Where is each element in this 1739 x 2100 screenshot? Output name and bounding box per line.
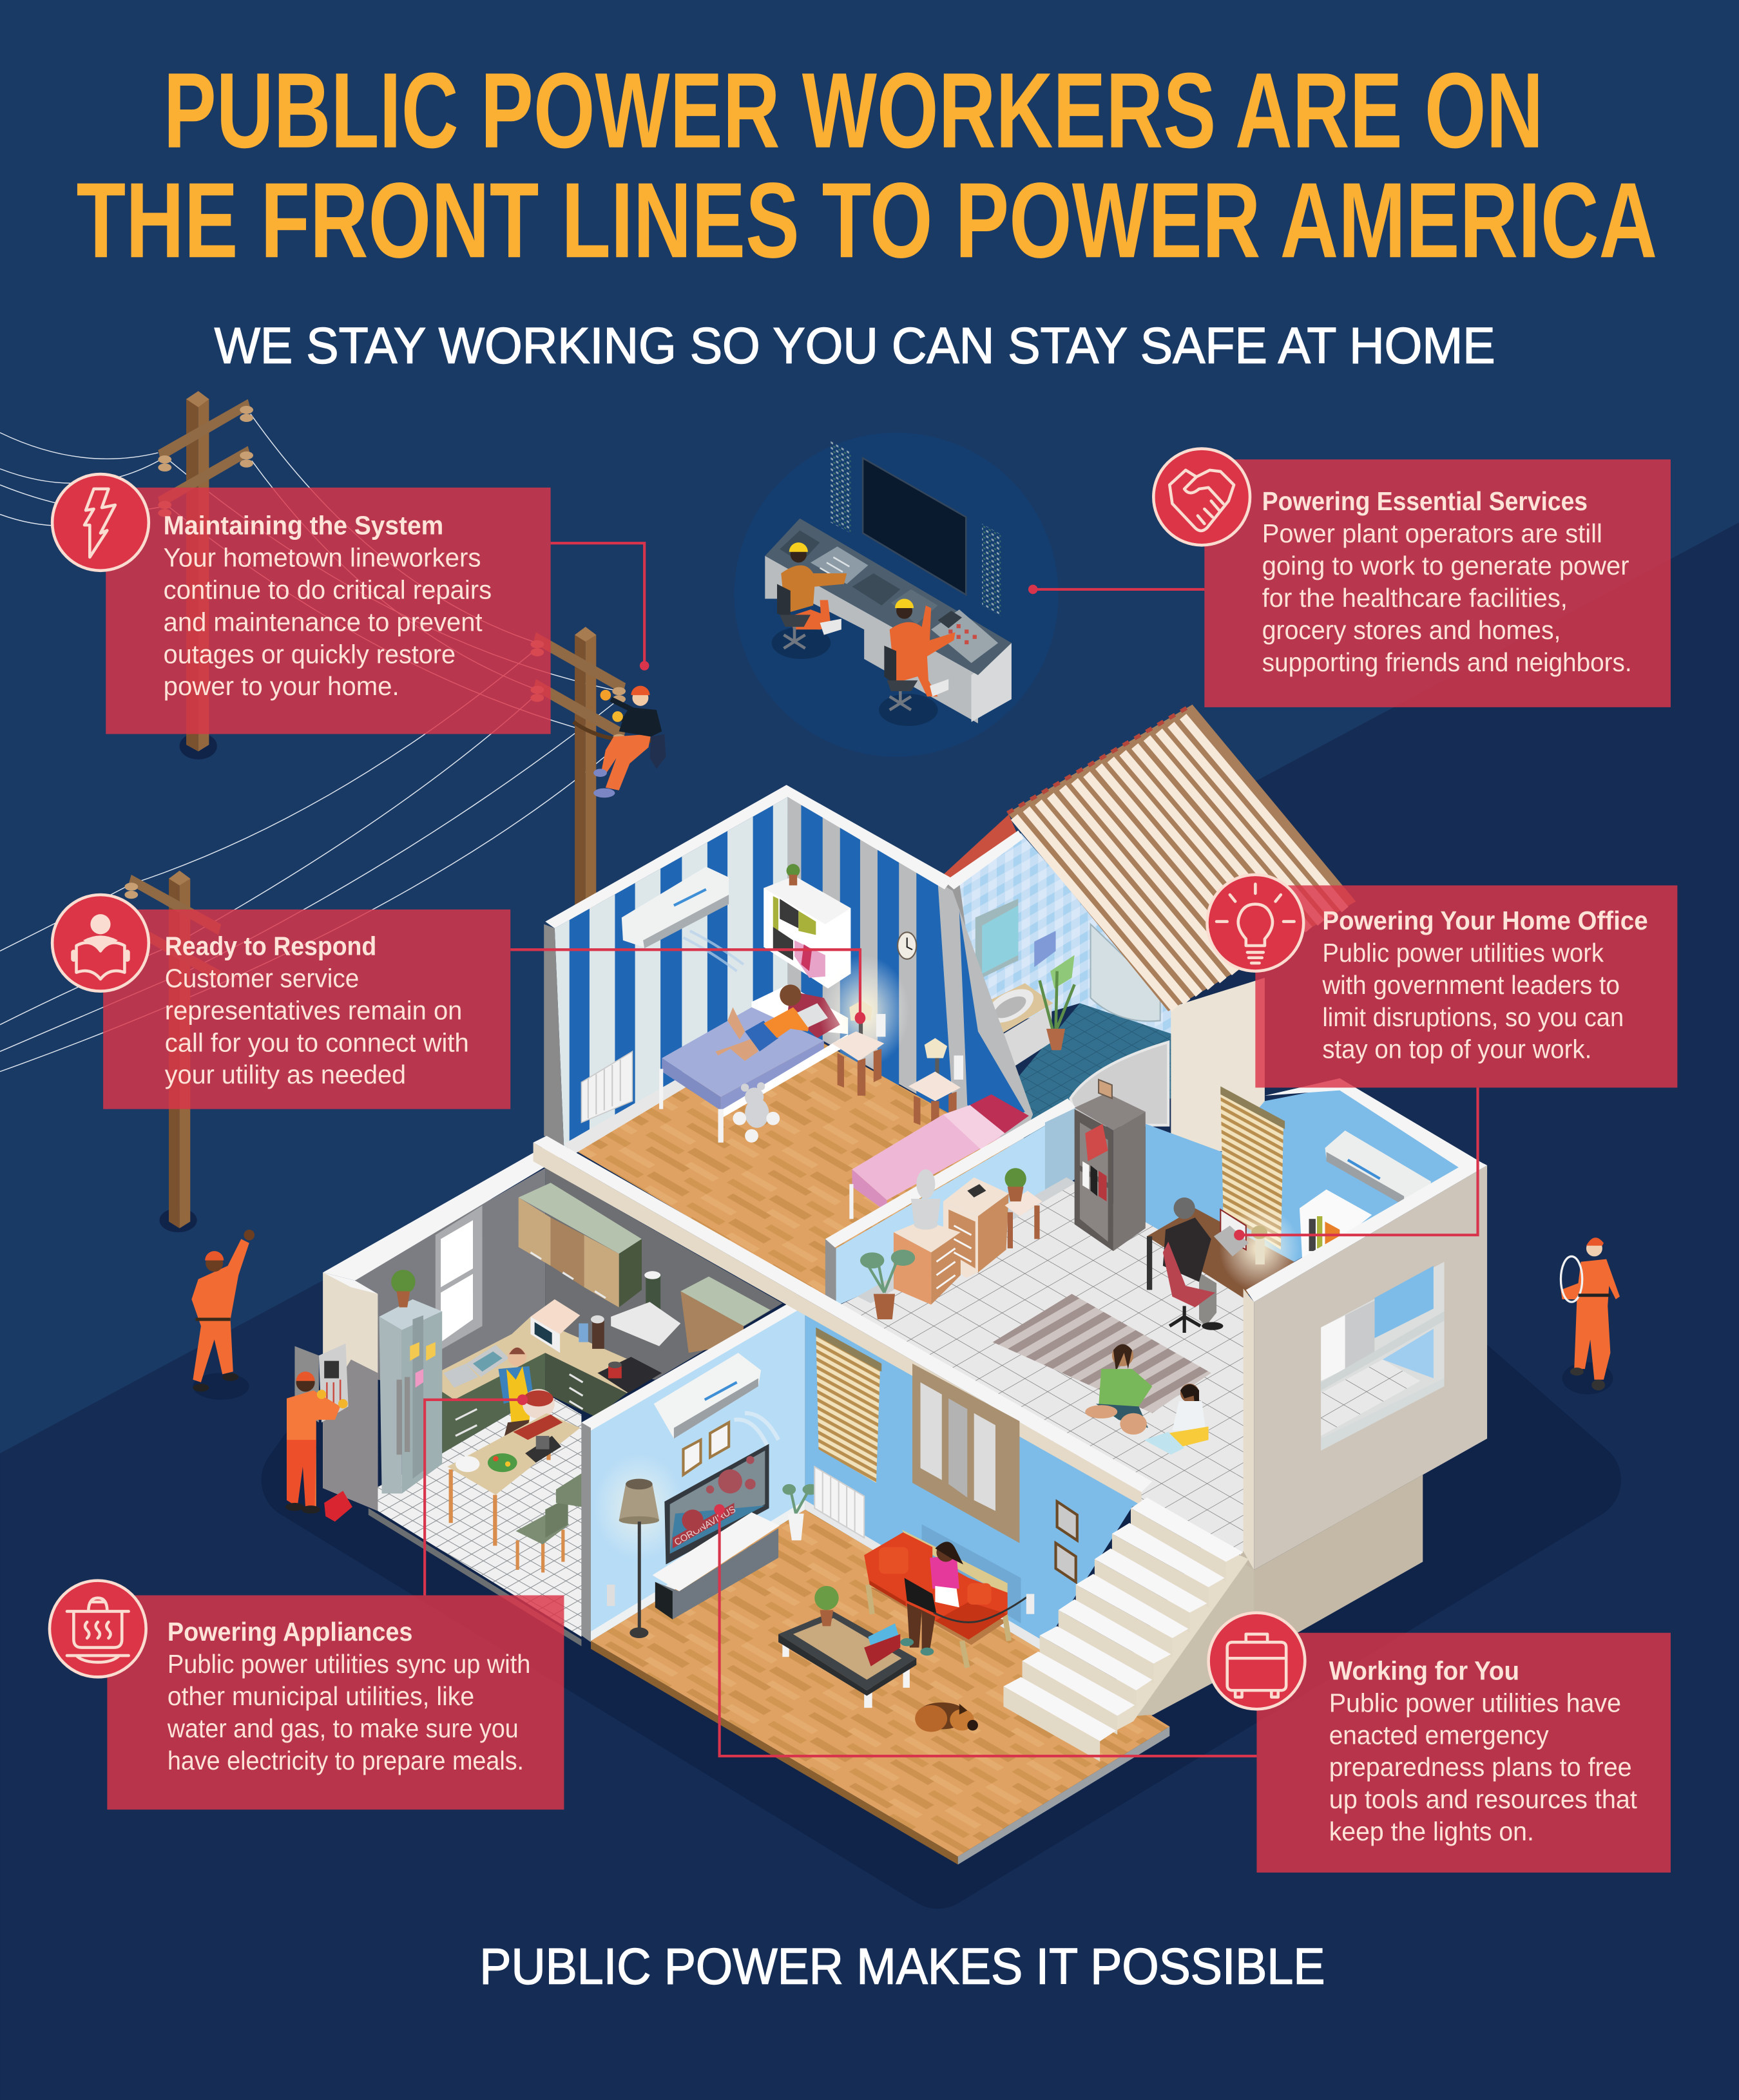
panel: powering essential services: Power plant operators are still bbox=[1262, 519, 1602, 548]
bookshelf bedroom bbox=[764, 864, 850, 989]
refrigerator bbox=[379, 1270, 442, 1493]
panel: ready to respond bbox=[52, 895, 510, 1109]
connector: ready to respond bbox=[510, 950, 865, 1024]
bathroom sink cabinet bbox=[978, 982, 1053, 1077]
lower foundation bbox=[1116, 1475, 1423, 1731]
bathroom bbox=[943, 814, 1174, 1138]
pink bed bbox=[849, 1094, 1029, 1219]
panel: powering your home office: limit disruptions, so you can bbox=[1322, 1002, 1624, 1032]
panel: powering your home office: stay on top of your work. bbox=[1322, 1035, 1591, 1064]
upper cabinets bbox=[519, 1183, 771, 1353]
living room bbox=[533, 1136, 1254, 1864]
panel: maintaining the system: power to your home. bbox=[164, 671, 399, 701]
panel: working for you: enacted emergency bbox=[1329, 1720, 1549, 1750]
icon: lightning bolt bbox=[52, 474, 149, 571]
mother and child bbox=[1085, 1344, 1209, 1455]
utility pole 3 bbox=[124, 871, 221, 1232]
operator two bbox=[879, 598, 956, 726]
bedroom striped left wall bbox=[544, 790, 788, 1165]
corner plant bbox=[782, 1484, 818, 1540]
television bbox=[664, 1444, 769, 1565]
panel: powering appliances: have electricity to prepare meals. bbox=[168, 1746, 524, 1775]
panel: powering appliances bbox=[50, 1581, 564, 1809]
teddy bear bbox=[733, 1082, 780, 1143]
bedroom wood floor bbox=[573, 1024, 1018, 1297]
living room walls bbox=[591, 1304, 805, 1641]
living room blinds bbox=[816, 1328, 881, 1483]
panel: powering essential services bbox=[1153, 449, 1671, 707]
bathroom mirror bbox=[975, 899, 1018, 978]
panel: ready to respond: your utility as needed bbox=[165, 1060, 406, 1089]
stool with plant bbox=[1005, 1168, 1042, 1248]
stove bbox=[597, 1357, 662, 1393]
large wall panels bbox=[912, 1364, 1019, 1543]
utility pole 1 bbox=[158, 391, 253, 759]
office back wall blue bbox=[1146, 1086, 1466, 1290]
bathroom plant bbox=[1040, 971, 1075, 1050]
kitchen walls bbox=[355, 1168, 545, 1393]
counter bbox=[442, 1317, 659, 1453]
office blinds bbox=[1220, 1086, 1285, 1250]
bedroom bbox=[544, 785, 1033, 1297]
connector: home office bbox=[1234, 1087, 1478, 1240]
kitchen bbox=[323, 1145, 782, 1647]
subtitle: WE STAY WORKING SO YOU CAN STAY SAFE AT HOME bbox=[215, 317, 1495, 374]
microwave bbox=[530, 1299, 580, 1353]
plant on fridge bbox=[391, 1270, 416, 1307]
pot on stove bbox=[608, 1362, 622, 1379]
panel: powering appliances: other municipal utilities, like bbox=[168, 1681, 474, 1711]
rug bbox=[993, 1294, 1211, 1413]
panel: ready to respond: Customer service bbox=[165, 963, 359, 993]
panel: powering appliances: Public power utilities sync up with bbox=[168, 1649, 530, 1679]
coffee items bbox=[579, 1315, 604, 1349]
panel: maintaining the system bbox=[52, 474, 551, 734]
connector: maintaining the system bbox=[551, 543, 649, 671]
bed with reader bbox=[659, 984, 848, 1143]
panel: powering your home office: Powering Your Home Office bbox=[1322, 906, 1648, 935]
utility pole 2 bbox=[530, 627, 626, 931]
kitchen sink bbox=[443, 1345, 509, 1388]
icon: light bulb bbox=[1207, 875, 1303, 971]
panel: maintaining the system: outages or quickly restore bbox=[164, 639, 456, 669]
connector: essential services bbox=[1028, 585, 1204, 594]
living room wood floor bbox=[591, 1509, 1169, 1864]
control room monitor bbox=[863, 458, 966, 595]
roof rafters bbox=[1008, 705, 1356, 1011]
upper office room bbox=[825, 1078, 1482, 1560]
panel: maintaining the system: Your hometown lineworkers bbox=[164, 543, 481, 573]
panel: powering essential services: Powering Essential Services bbox=[1262, 486, 1588, 516]
icon: cooking pot bbox=[50, 1581, 146, 1677]
front beige wall with window bbox=[1116, 1159, 1487, 1731]
dressers bbox=[894, 1178, 1009, 1304]
control room circle bbox=[734, 433, 1059, 757]
window bbox=[1321, 1262, 1445, 1451]
radiator bedroom bbox=[581, 1051, 632, 1122]
panel: powering your home office: Public power utilities work bbox=[1322, 938, 1604, 968]
kitchen floor bbox=[378, 1393, 581, 1637]
kitchen window bbox=[436, 1205, 483, 1353]
console base bbox=[765, 519, 1012, 723]
bathroom shower bbox=[1091, 924, 1160, 1021]
radiator bbox=[814, 1467, 864, 1538]
lineworker on pole bbox=[573, 686, 666, 797]
panel: ready to respond: call for you to connect with bbox=[165, 1027, 469, 1057]
tv cabinet bbox=[653, 1513, 780, 1619]
floor lamp bbox=[593, 1453, 685, 1638]
panel: powering your home office bbox=[1207, 875, 1677, 1087]
panel: maintaining the system: continue to do critical repairs bbox=[164, 575, 492, 604]
panel: working for you: Working for You bbox=[1329, 1656, 1519, 1686]
panel: working for you: preparedness plans to free bbox=[1329, 1752, 1632, 1782]
desk with man bbox=[1147, 1198, 1300, 1333]
air conditioner bedroom bbox=[622, 866, 744, 971]
panel: powering essential services: grocery stores and homes, bbox=[1262, 615, 1561, 645]
dog bbox=[915, 1703, 978, 1732]
panel: powering appliances: water and gas, to make sure you bbox=[167, 1713, 519, 1743]
panel: maintaining the system: and maintenance to prevent bbox=[164, 607, 483, 636]
icon: tool case bbox=[1209, 1613, 1305, 1709]
panel: working for you: Public power utilities have bbox=[1329, 1688, 1621, 1717]
towels bbox=[1034, 931, 1075, 989]
beige chimney wall bbox=[1171, 978, 1265, 1152]
sofa with woman bbox=[864, 1524, 1034, 1668]
boy reading on bed bbox=[715, 984, 828, 1061]
nightstand and lamp one bbox=[818, 955, 910, 1096]
office air conditioner bbox=[1325, 1131, 1431, 1205]
panel: ready to respond: representatives remain on bbox=[165, 995, 462, 1025]
floor plant bbox=[860, 1250, 915, 1319]
bust statue bbox=[911, 1169, 941, 1230]
tool box bbox=[324, 1491, 352, 1522]
wall clock bbox=[898, 932, 916, 959]
air conditioner living room bbox=[654, 1353, 778, 1447]
staircase bbox=[1003, 1498, 1254, 1761]
panel: powering your home office: with government leaders to bbox=[1321, 970, 1620, 1000]
beam between floors bbox=[533, 1136, 1152, 1505]
frame on bookcase top bbox=[1099, 1080, 1112, 1098]
panel: powering essential services: going to work to generate power bbox=[1262, 551, 1629, 580]
office tile floor bbox=[838, 1178, 1246, 1560]
panel: working for you: keep the lights on. bbox=[1329, 1817, 1534, 1846]
panel: powering essential services: for the healthcare facilities, bbox=[1262, 583, 1568, 613]
panel: maintaining the system: Maintaining the System bbox=[164, 511, 443, 540]
kitchen chair bbox=[516, 1473, 581, 1572]
waving worker bbox=[191, 1230, 255, 1400]
office partition wall bbox=[825, 1098, 1076, 1306]
wall frames bbox=[1056, 1502, 1077, 1582]
connector: working for you bbox=[714, 1504, 1256, 1756]
operator one bbox=[772, 542, 847, 659]
title bbox=[77, 51, 1657, 280]
panel: working for you: up tools and resources that bbox=[1329, 1784, 1637, 1814]
connector: appliances bbox=[425, 1395, 528, 1596]
bookcase bbox=[1075, 1093, 1146, 1251]
tablet on dresser bbox=[967, 1184, 986, 1198]
icon: handshake bbox=[1153, 449, 1250, 545]
footer tagline: PUBLIC POWER MAKES IT POSSIBLE bbox=[479, 1938, 1325, 1995]
standing worker with coil bbox=[1561, 1237, 1620, 1395]
coffee table bbox=[778, 1586, 916, 1708]
utility wires bbox=[0, 414, 619, 1071]
picture frames bbox=[683, 1422, 729, 1475]
television: CORONAVIRUS bbox=[673, 1504, 738, 1548]
range hood bbox=[611, 1271, 680, 1346]
bedroom striped right wall bbox=[788, 797, 1033, 1152]
bathtub bbox=[1070, 1042, 1168, 1126]
nightstand and lamp two bbox=[908, 1038, 963, 1128]
office white shelf bbox=[1300, 1189, 1372, 1259]
kitchen table bbox=[448, 1413, 580, 1546]
cooking person bbox=[499, 1348, 555, 1444]
icon: person reading bbox=[52, 895, 149, 991]
panel: powering essential services: supporting friends and neighbors. bbox=[1262, 647, 1632, 677]
panel: ready to respond: Ready to Respond bbox=[165, 931, 376, 961]
electric panel and worker bbox=[285, 1344, 352, 1522]
wall outlet bbox=[607, 1585, 615, 1606]
panel: powering appliances: Powering Appliances bbox=[168, 1617, 412, 1647]
panel: working for you bbox=[1209, 1613, 1671, 1873]
